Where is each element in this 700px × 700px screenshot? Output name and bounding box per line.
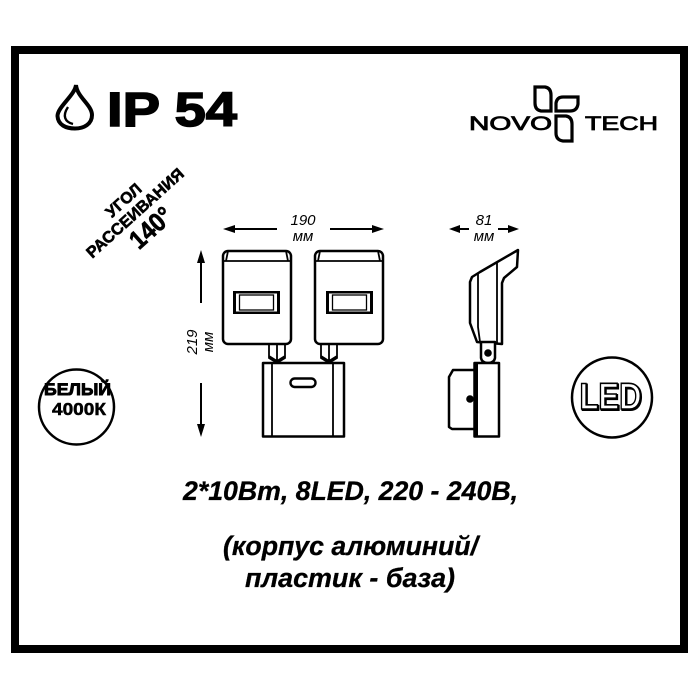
label: mm depth: мм bbox=[474, 228, 494, 245]
badge circle bbox=[39, 370, 114, 444]
dimension: height 219 mm bbox=[184, 250, 217, 437]
label: 81: 81 bbox=[476, 212, 492, 229]
arrow: height down bbox=[197, 383, 205, 437]
text: 140 degrees: 140° bbox=[123, 200, 179, 255]
drawing: front view bbox=[223, 251, 383, 436]
lamp head right bbox=[315, 251, 383, 344]
lamp head left bbox=[223, 251, 291, 344]
LED outlined text: LED bbox=[580, 376, 642, 417]
text: power specification: 2*10Вm, 8LED, 220 - 240В, bbox=[182, 476, 518, 506]
arrow: depth left bbox=[449, 225, 469, 233]
logo wordmark left: NOVO bbox=[469, 114, 552, 135]
LED shadow text: LED bbox=[580, 377, 642, 418]
label: 190: 190 bbox=[290, 212, 316, 229]
text: material line 1: (корпус алюминий/ bbox=[223, 531, 481, 561]
drawing: side view bbox=[449, 250, 518, 436]
icon: water drop with IP rating bbox=[58, 84, 237, 137]
heading: IP 54: IP 54 bbox=[107, 84, 237, 137]
side joint bbox=[481, 342, 495, 363]
logo wordmark right: TECH bbox=[585, 114, 658, 135]
icon: water drop bbox=[58, 85, 92, 128]
badge text: white: БЕЛЫЙ bbox=[44, 380, 111, 399]
arrow: height up bbox=[197, 250, 205, 303]
joint right bbox=[321, 344, 337, 363]
arrow: depth right bbox=[498, 225, 519, 233]
dimension: width 190 mm bbox=[223, 212, 384, 245]
label: mm vertical: мм bbox=[200, 332, 217, 352]
badge text: 4000K: 4000К bbox=[52, 399, 106, 419]
label: 219: 219 bbox=[184, 329, 201, 356]
label: beam angle 140 degrees bbox=[72, 153, 206, 282]
base box bbox=[263, 363, 344, 436]
LED circle bbox=[572, 358, 652, 438]
joint left bbox=[269, 344, 285, 363]
label: mm: мм bbox=[293, 228, 313, 245]
badge: LED bbox=[572, 358, 652, 438]
badge: white 4000K bbox=[39, 370, 114, 444]
logo: Novotech bbox=[469, 87, 658, 141]
text: рассеивания: РАССЕИВАНИЯ bbox=[84, 166, 188, 262]
side base bbox=[474, 363, 499, 436]
logo leaves bbox=[535, 87, 578, 141]
text: угол: УГОЛ bbox=[103, 181, 146, 221]
arrow: width right bbox=[330, 225, 384, 233]
text: material line 2: пластик - база) bbox=[245, 563, 455, 593]
arrow: width left bbox=[223, 225, 277, 233]
dimension: depth 81 mm bbox=[449, 212, 519, 245]
side lamp head bbox=[470, 250, 518, 344]
side driver box bbox=[449, 370, 474, 429]
